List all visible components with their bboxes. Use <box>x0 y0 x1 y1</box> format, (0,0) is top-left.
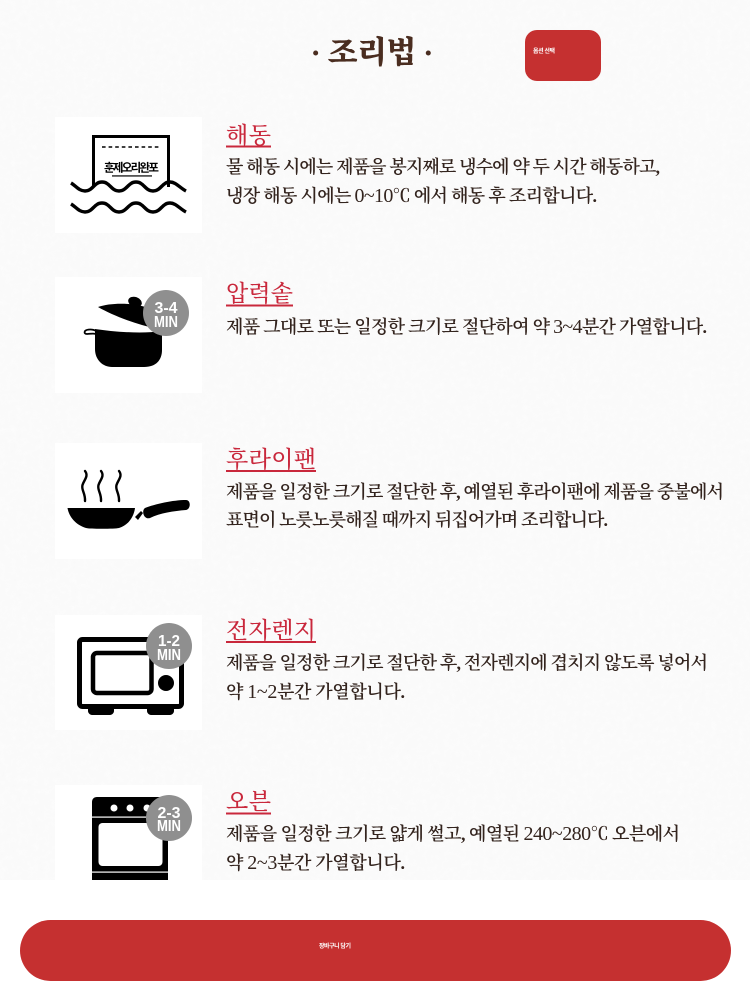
icon: package in water <box>55 117 202 233</box>
step: frying pan <box>55 443 724 559</box>
icon: pot with time badge: MIN <box>154 314 178 331</box>
bottom red pill button <box>20 920 731 981</box>
text: thawing instructions: 냉장 해동 시에는 0~10℃ 에서 해동 후 조리합니다. <box>226 185 597 207</box>
text: frying pan instructions: 표면이 노릇노릇해질 때까지 뒤집어가며 조리합니다. <box>226 509 608 530</box>
heading: thawing: 해동 <box>226 123 271 148</box>
icon: pot with time badge <box>55 277 202 393</box>
icon: package in water: 훈제오리완포 <box>104 160 159 174</box>
heading: pressure cooker: 압력솥 <box>226 281 293 306</box>
icon: oven with time badge <box>55 785 202 880</box>
step: oven <box>55 785 680 880</box>
bottom red pill button: 장바구니 담기 <box>319 942 351 950</box>
text: microwave instructions: 제품을 일정한 크기로 절단한 후, 전자렌지에 겹치지 않도록 넣어서 <box>226 652 708 673</box>
icon: pot with time badge: 3-4 <box>154 300 178 317</box>
text: oven instructions: 약 2~3분간 가열합니다. <box>226 852 405 874</box>
title: · 조리법 · <box>310 35 434 70</box>
text: microwave instructions: 약 1~2분간 가열합니다. <box>226 681 405 703</box>
text: thawing instructions: 물 해동 시에는 제품을 봉지째로 냉수에 약 두 시간 해동하고, <box>226 156 660 177</box>
text: frying pan instructions: 제품을 일정한 크기로 절단한 후, 예열된 후라이팬에 제품을 중불에서 <box>226 481 724 502</box>
step: pressure cooker <box>55 277 707 393</box>
heading: oven: 오븐 <box>226 789 271 814</box>
step: thawing <box>55 117 660 233</box>
icon: pan with steam <box>55 443 202 559</box>
text: frying pan instructions <box>226 481 724 530</box>
text: oven instructions: 제품을 일정한 크기로 얇게 썰고, 예열된 240~280℃ 오븐에서 <box>226 823 680 845</box>
step: microwave <box>55 615 708 730</box>
icon: microwave with time badge: 1-2 <box>158 633 180 650</box>
heading: frying pan: 후라이팬 <box>226 447 316 472</box>
top red button <box>525 30 601 81</box>
icon: oven with time badge: 2-3 <box>158 805 181 822</box>
icon: microwave with time badge: MIN <box>157 647 181 664</box>
text: thawing instructions <box>226 156 660 207</box>
text: pressure cooker instructions: 제품 그대로 또는 일정한 크기로 절단하여 약 3~4분간 가열합니다. <box>226 316 707 338</box>
text: microwave instructions <box>226 652 708 703</box>
text: oven instructions <box>226 823 680 874</box>
heading: microwave: 전자렌지 <box>226 618 316 643</box>
icon: microwave with time badge <box>55 615 202 730</box>
top red button: 옵션 선택 <box>533 47 555 55</box>
icon: oven with time badge: MIN <box>157 818 181 835</box>
